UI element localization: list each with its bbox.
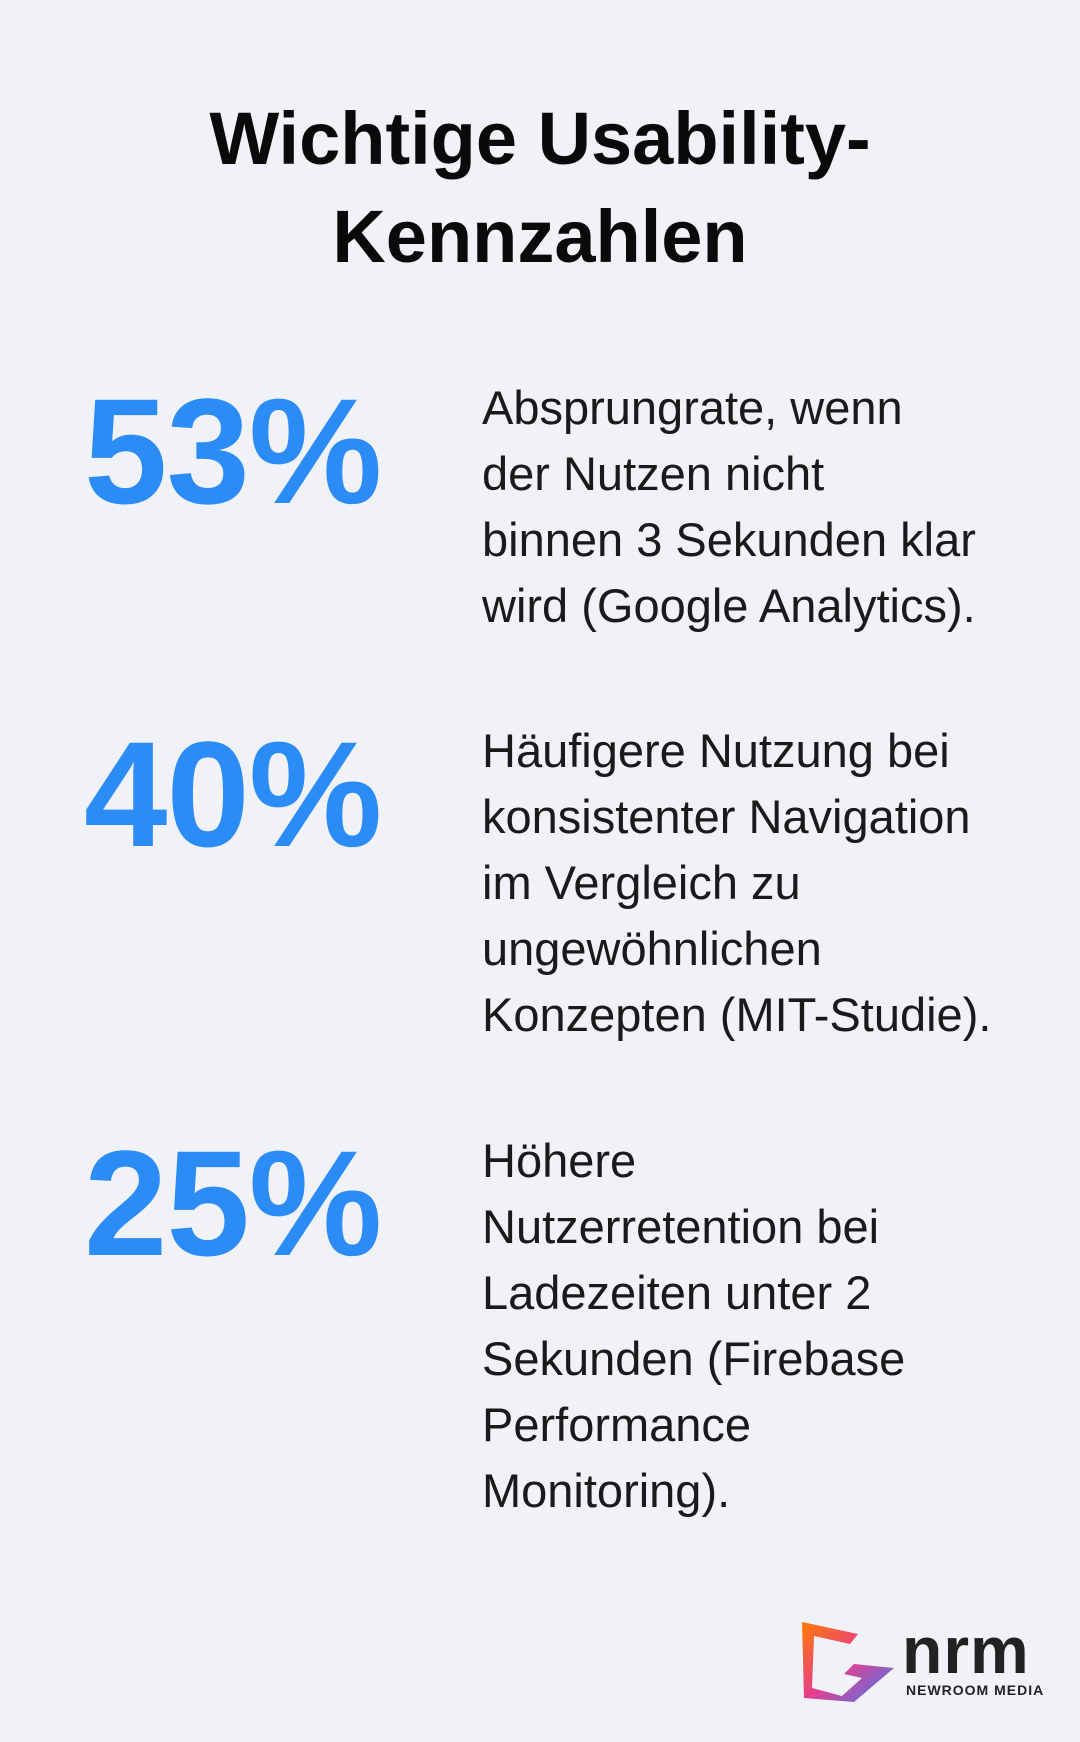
text: 40% description <box>482 724 991 1041</box>
text: 25% description: Monitoring). <box>482 1464 730 1517</box>
icon: logo mark <box>802 1622 894 1702</box>
text: 40% description: im Vergleich zu <box>482 856 801 909</box>
text: 40% description: Häufigere Nutzung bei <box>482 724 950 777</box>
text: 40% description: Konzepten (MIT-Studie). <box>482 988 991 1041</box>
text: 53% description: wird (Google Analytics). <box>482 579 976 632</box>
text: 40% description: ungewöhnlichen <box>482 922 822 975</box>
text: NEWROOM MEDIA: NEWROOM MEDIA <box>906 1682 1044 1698</box>
text: 53% description <box>482 381 976 632</box>
text: 25% description <box>482 1134 905 1517</box>
text: 25% description: Nutzerretention bei <box>482 1200 879 1253</box>
text: 53% description: der Nutzen nicht <box>482 447 824 500</box>
stat: 40%: 40% <box>84 710 381 878</box>
stat: 53%: 53% <box>84 367 381 535</box>
text: 25% description: Höhere <box>482 1134 636 1187</box>
title: Kennzahlen <box>332 195 748 278</box>
text: 40% description: konsistenter Navigation <box>482 790 971 843</box>
text: 53% description: Absprungrate, wenn <box>482 381 903 434</box>
text: 25% description: Sekunden (Firebase <box>482 1332 905 1385</box>
text: 25% description: Ladezeiten unter 2 <box>482 1266 871 1319</box>
text: nrm: nrm <box>902 1613 1030 1687</box>
logo: nrm newroom media <box>802 1613 1044 1702</box>
title <box>209 97 871 278</box>
text: 53% description: binnen 3 Sekunden klar <box>482 513 976 566</box>
stat: 25%: 25% <box>84 1119 381 1287</box>
title: Wichtige Usability- <box>209 97 871 180</box>
text: 25% description: Performance <box>482 1398 751 1451</box>
